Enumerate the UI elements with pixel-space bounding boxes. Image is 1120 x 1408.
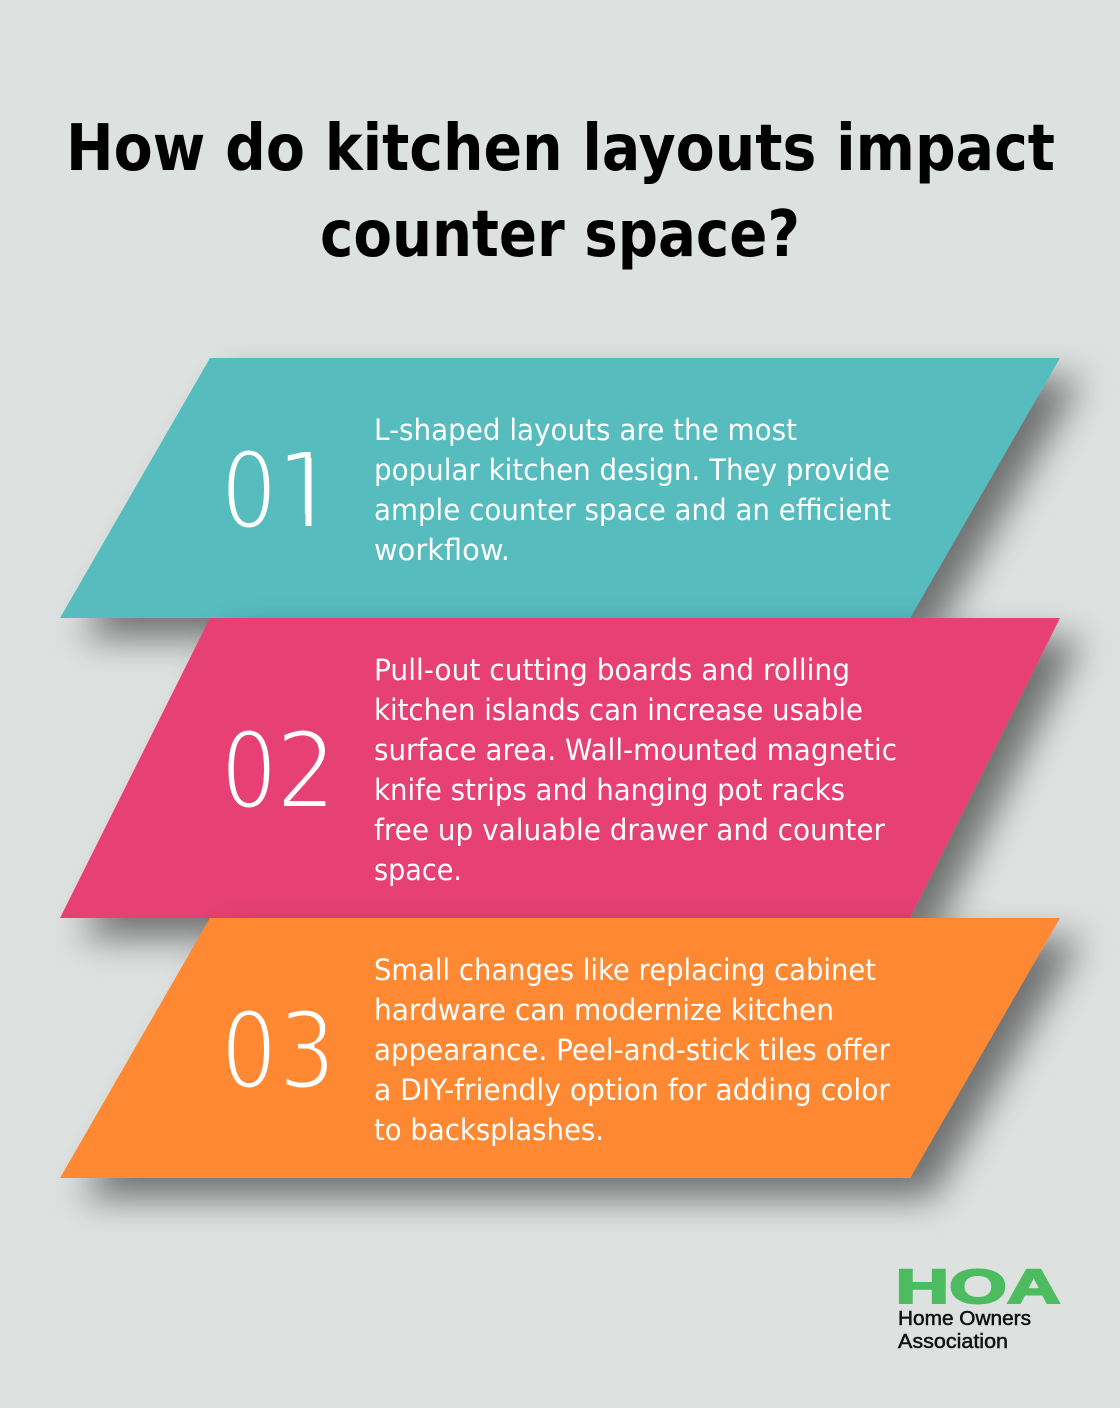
step 03 banner [60,918,1060,1178]
title [66,112,1055,272]
step 03 text: appearance. Peel-and-stick tiles offer [374,1033,891,1067]
step 01 text: ample counter space and an efficient [374,493,891,527]
step 01 number [221,430,337,554]
step 02 number: 0 [221,710,277,834]
logo: HOA Home Owners Association: Association [898,1331,1008,1353]
step 03 number: 0 [221,990,277,1114]
step 02 text: space. [374,853,462,887]
step 02 text: surface area. Wall-mounted magnetic [374,733,897,767]
step 02 text: kitchen islands can increase usable [374,693,863,727]
step 02 text: free up valuable drawer and counter [374,813,886,847]
step 03 number: 3 [278,990,336,1114]
step 01 text [374,413,891,567]
step 03 text: a DIY-friendly option for adding color [374,1073,891,1107]
panel: step 03 [60,918,1060,1178]
step 02 number: 2 [275,710,337,834]
logo: HOA Home Owners Association: Home Owners [898,1308,1031,1330]
step 03 number [221,990,336,1114]
step 03 text: hardware can modernize kitchen [374,993,834,1027]
step 01 text: L-shaped layouts are the most [374,413,797,447]
logo: HOA Home Owners Association: HOA [896,1261,1060,1314]
logo: HOA Home Owners Association [896,1261,1060,1353]
title: counter space? [320,198,800,272]
step 02 text: Pull-out cutting boards and rolling [374,653,850,687]
step 01 text: workflow. [374,533,510,567]
step 02 text: knife strips and hanging pot racks [374,773,845,807]
panel: step 02 [60,618,1060,918]
step 01 number: 1 [275,430,337,554]
step 02 number [221,710,337,834]
step 01 banner [60,358,1060,618]
step 01 number: 0 [221,430,277,554]
step 01 text: popular kitchen design. They provide [374,453,890,487]
step 02 banner [60,618,1060,918]
step 03 text [374,953,891,1147]
step 02 text [374,653,897,887]
step 03 text: to backsplashes. [374,1113,604,1147]
panel: step 01 [60,358,1060,618]
step 03 text: Small changes like replacing cabinet [374,953,876,987]
